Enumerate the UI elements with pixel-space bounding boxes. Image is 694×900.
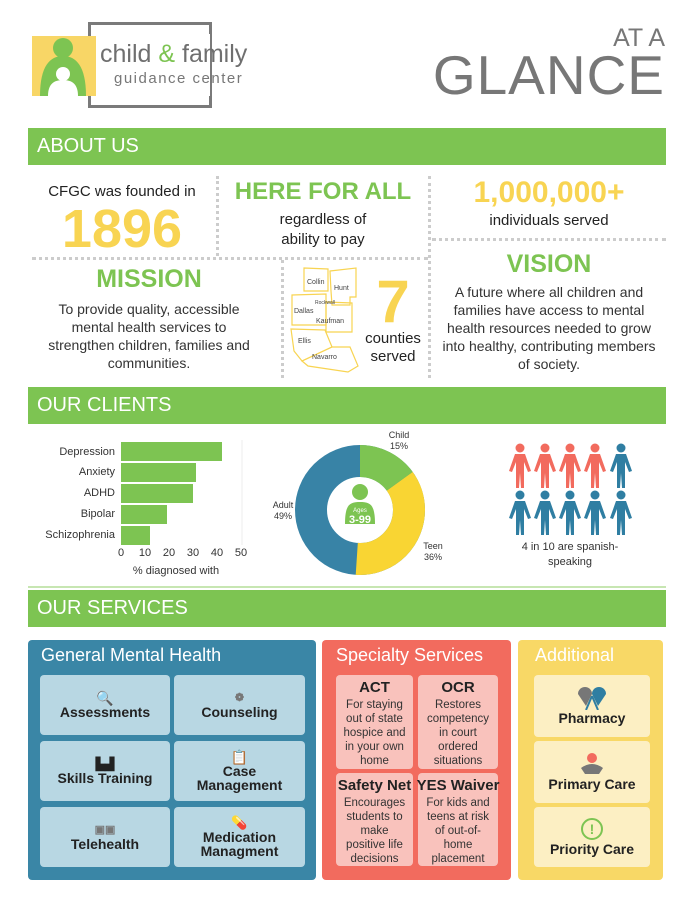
donut chart: Teen xyxy=(423,541,443,551)
card: ACT: ACT xyxy=(359,679,390,696)
card: pharmacy xyxy=(534,675,650,737)
map: Kaufman xyxy=(316,318,344,325)
bar chart: % diagnosed with xyxy=(133,565,219,577)
band: our services: OUR SERVICES xyxy=(37,597,188,619)
band: our services xyxy=(28,590,666,627)
bar chart xyxy=(45,440,247,577)
card: case management: Management xyxy=(197,777,282,793)
card: OCR: Restores competency in court ordered situations xyxy=(427,699,489,767)
bar chart: Depression xyxy=(59,446,115,458)
logo xyxy=(32,22,248,108)
card: medication: Managment xyxy=(201,843,278,859)
vision: VISION xyxy=(507,250,591,278)
card: skills training xyxy=(40,741,170,801)
card: telehealth xyxy=(40,807,170,867)
bar chart: 50 xyxy=(235,547,247,559)
card: skills training: Skills Training xyxy=(58,770,152,786)
spanish caption: speaking xyxy=(548,556,592,568)
bar chart: 30 xyxy=(187,547,199,559)
founded: 1896 xyxy=(62,199,182,259)
heading: general mental health: General Mental Health xyxy=(41,645,221,665)
panel: additional xyxy=(518,640,663,880)
spanish caption xyxy=(522,541,618,568)
bar chart: 10 xyxy=(139,547,151,559)
donut chart: 36% xyxy=(424,552,442,562)
card: medication: Medication xyxy=(203,829,276,845)
mission: MISSION xyxy=(96,265,202,293)
donut chart: Adult xyxy=(273,500,294,510)
bar chart: Bipolar xyxy=(81,508,115,520)
map: Ellis xyxy=(298,338,311,345)
map: Hunt xyxy=(334,285,349,292)
individuals: 1,000,000+ xyxy=(474,176,624,209)
founded xyxy=(48,183,196,259)
card: counseling: ❁ xyxy=(235,692,244,704)
card: yes waiver: For kids and teens at risk of out-of-home placement xyxy=(426,797,490,865)
logo icon xyxy=(32,36,96,96)
mission: To provide quality, accessible mental health services to strengthen children, families and communities. xyxy=(48,301,250,371)
bar chart: 20 xyxy=(163,547,175,559)
card: counseling: Counseling xyxy=(201,704,278,720)
here for all: regardless of xyxy=(280,211,366,228)
map: Dallas xyxy=(294,308,314,315)
mission xyxy=(48,265,250,371)
map: Collin xyxy=(307,279,325,286)
card: ACT xyxy=(336,675,413,769)
donut chart: 15% xyxy=(390,441,408,451)
logo text: child & family xyxy=(100,40,247,68)
card: medication xyxy=(174,807,305,867)
band: about us: ABOUT US xyxy=(37,135,139,157)
panel: general mental health xyxy=(28,640,316,880)
card: case management: 📋 xyxy=(231,749,248,765)
card: assessments xyxy=(40,675,170,735)
card: safety net: Safety Net xyxy=(338,777,411,794)
logo: guidance center xyxy=(114,70,243,87)
band: our clients: OUR CLIENTS xyxy=(37,394,171,416)
card: counseling xyxy=(174,675,305,735)
card: primary care: Primary Care xyxy=(548,776,636,792)
card: primary care xyxy=(534,741,650,803)
card: priority care xyxy=(534,807,650,867)
bar chart: 40 xyxy=(211,547,223,559)
title: GLANCE xyxy=(433,44,665,106)
card: priority care: Priority Care xyxy=(550,841,634,857)
here for all: HERE FOR ALL xyxy=(235,178,411,205)
donut chart: Child xyxy=(389,430,409,440)
individuals: individuals served xyxy=(489,212,609,229)
map: Rockwall xyxy=(315,300,335,306)
card: OCR xyxy=(418,675,498,769)
bar chart: ADHD xyxy=(84,487,115,499)
map xyxy=(290,267,359,373)
card: pharmacy: Pharmacy xyxy=(559,710,625,726)
founded: CFGC was founded in xyxy=(48,183,196,200)
here for all xyxy=(235,178,411,248)
card: case management: Case xyxy=(223,763,256,779)
donut chart: 49% xyxy=(274,511,292,521)
donut chart: 3-99 xyxy=(349,514,371,526)
counties: served xyxy=(370,348,416,365)
card: skills training: ▙▟ xyxy=(96,757,114,771)
card: assessments: Assessments xyxy=(60,704,150,720)
map: Navarro xyxy=(312,354,337,361)
card: priority care: ! xyxy=(590,821,594,837)
card: assessments: 🔍 xyxy=(96,690,114,706)
individuals xyxy=(474,176,624,229)
counties xyxy=(365,268,421,365)
card: yes waiver: YES Waiver xyxy=(417,777,499,794)
panel: specialty services xyxy=(322,640,511,880)
title: AT A xyxy=(613,24,665,52)
band: our clients xyxy=(28,387,666,424)
counties: 7 xyxy=(376,268,410,335)
card: ACT: For staying out of state hospice and in your own home xyxy=(343,699,406,767)
logo frame xyxy=(88,22,212,108)
people icons xyxy=(509,444,632,535)
bar chart: Anxiety xyxy=(79,466,115,478)
here for all: ability to pay xyxy=(281,231,365,248)
card: case management xyxy=(174,741,305,801)
card: telehealth: ▣▣ xyxy=(95,824,115,836)
card: medication: 💊 xyxy=(231,815,248,830)
donut chart xyxy=(272,430,443,575)
band: about us xyxy=(28,128,666,165)
donut chart: Ages xyxy=(353,508,367,514)
card: safety net xyxy=(336,773,413,866)
heading: specialty: Specialty Services xyxy=(336,645,483,665)
bar chart: Schizophrenia xyxy=(45,529,116,541)
card: telehealth: Telehealth xyxy=(71,836,139,852)
vision: A future where all children and families have access to mental health resources needed to grow into healthy, contributing members of society. xyxy=(443,284,655,372)
card: OCR: OCR xyxy=(441,679,475,696)
heading: additional: Additional xyxy=(535,645,614,665)
card: yes waiver xyxy=(418,773,498,866)
card: safety net: Encourages students to make positive life decisions xyxy=(344,797,405,865)
counties: counties xyxy=(365,330,421,347)
bar chart: 0 xyxy=(118,547,124,559)
spanish caption: 4 in 10 are spanish- xyxy=(522,541,618,553)
